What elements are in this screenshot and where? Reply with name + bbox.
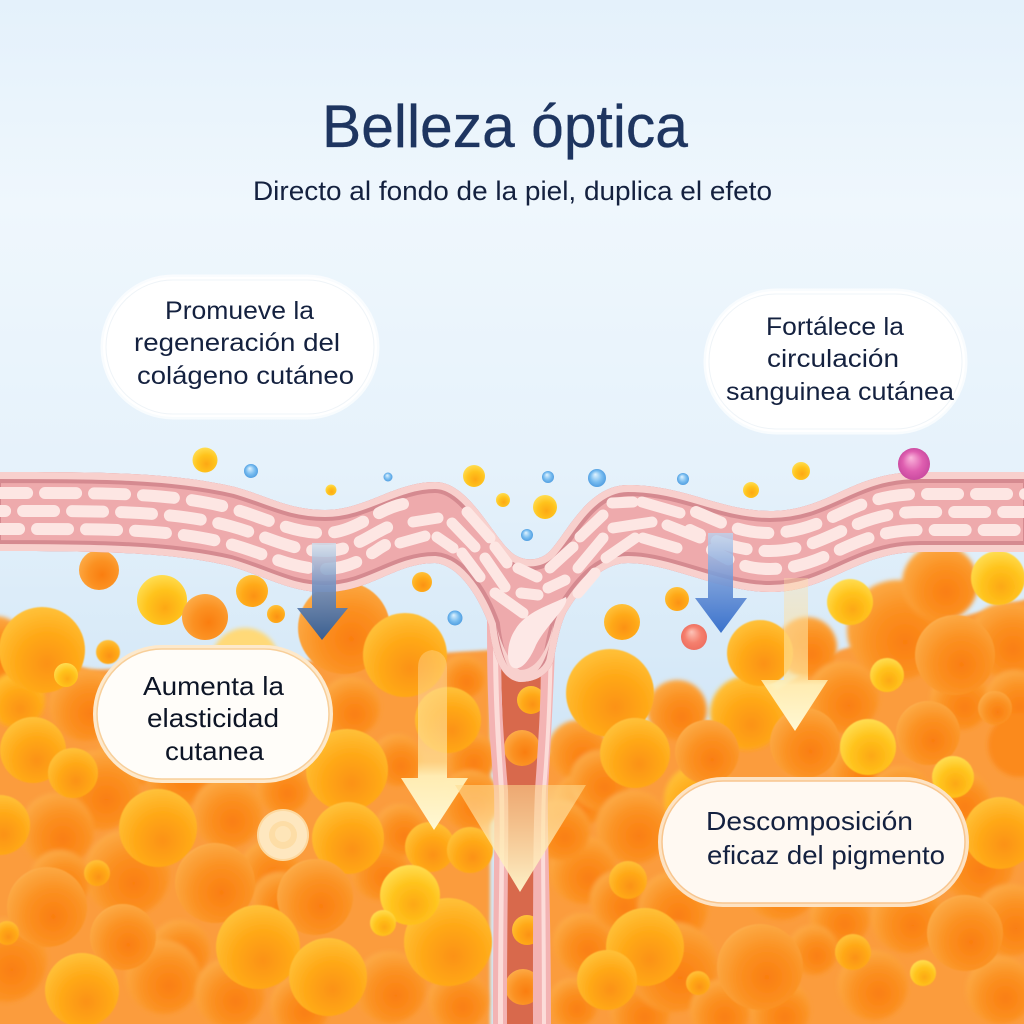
callout: pigment: eficaz del pigmento [707, 840, 945, 870]
subtitle: Directo al fondo de la piel, duplica el efeto [253, 176, 772, 206]
arrow: yellow large triangle [455, 785, 586, 892]
arrow: dark blue left [297, 543, 348, 640]
callout: pigment: Descomposición [706, 806, 913, 836]
callout: collagen: Promueve la [165, 297, 314, 325]
callout: circulation: Fortálece la [766, 313, 904, 341]
front spheres [0, 551, 1024, 1024]
pink sphere [898, 448, 930, 480]
callout: collagen: colágeno cutáneo [137, 362, 354, 390]
skin cells [0, 493, 1024, 569]
callout: elasticity: Aumenta la [143, 671, 285, 701]
callout: circulation: circulación [767, 345, 899, 373]
callout: elasticity: cutanea [165, 736, 265, 766]
arrow: yellow left [401, 650, 468, 830]
callout: collagen [103, 277, 377, 417]
skin layer [0, 472, 1024, 682]
callout: elasticity [95, 647, 331, 781]
follicle bulb [497, 625, 553, 681]
bulb droplet [508, 597, 566, 668]
orange sphere mass [0, 545, 1024, 1024]
title: Belleza óptica [322, 93, 689, 160]
callout: elasticity: elasticidad [147, 703, 279, 733]
arrow: yellow right [761, 578, 828, 731]
arrow: blue right [695, 533, 747, 633]
free floating spheres [54, 448, 810, 687]
callout: circulation [706, 291, 965, 432]
callout: circulation: sanguinea cutánea [726, 378, 954, 406]
follicle duct [487, 620, 556, 1024]
callout: collagen: regeneración del [134, 329, 340, 357]
back spheres [0, 545, 1024, 1024]
callout: pigment [660, 779, 967, 905]
glowing ring sphere [257, 809, 309, 861]
